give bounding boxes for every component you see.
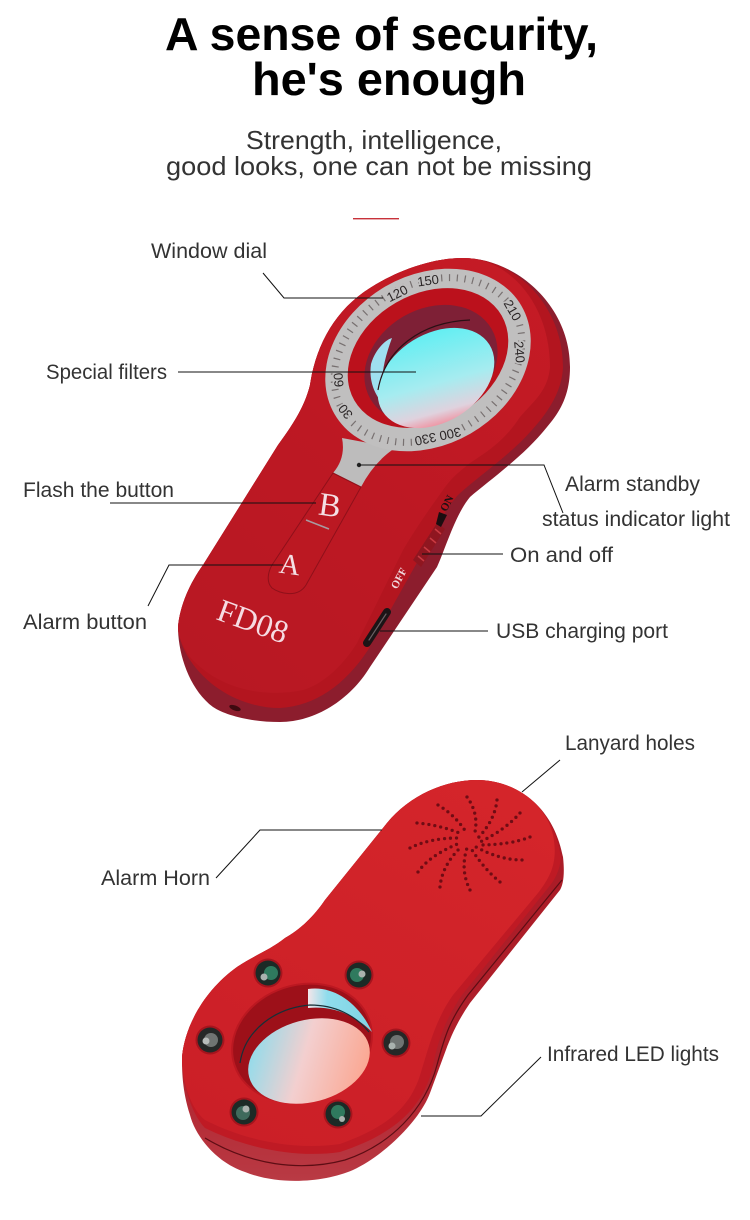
dial numbers: 240 (511, 341, 528, 364)
callout: USB charging port: USB charging port (496, 620, 668, 643)
power switch: ON (438, 493, 457, 514)
device bevel (178, 258, 563, 708)
product: back view of detector (182, 780, 564, 1181)
speaker dots (410, 797, 530, 890)
rear shell side (182, 780, 564, 1181)
subtitle (166, 125, 592, 181)
dial numbers: 210 (501, 297, 524, 323)
device side shell (178, 258, 570, 722)
callout: Alarm standby status indicator light (359, 465, 730, 531)
subtitle: Strength, intelligence, (246, 125, 502, 155)
USB port (367, 612, 387, 643)
rear shell face (182, 780, 555, 1146)
bottom hole (229, 704, 241, 712)
special filter glass (359, 307, 513, 449)
callout: Alarm standby status indicator light: Alarm standby (565, 473, 700, 496)
button B letter: B (316, 487, 343, 525)
dial numbers (330, 272, 528, 449)
silver dial ring and tab (292, 232, 564, 488)
dial numbers: 60 (330, 372, 347, 388)
callout: Alarm button: Alarm button (23, 611, 147, 634)
product: front view of detector (178, 232, 570, 722)
infrared LEDs (196, 958, 410, 1128)
red bezel (322, 260, 534, 456)
lens upper reflection (308, 988, 372, 1032)
infrared filter glass (239, 1005, 379, 1117)
rear shell bevel (182, 780, 561, 1154)
lens inner arc (240, 1005, 369, 1063)
callout: On and off: On and off (510, 544, 613, 567)
callout: Special filters: Special filters (46, 361, 167, 384)
lens recess (217, 966, 387, 1120)
accent rule (353, 218, 399, 219)
button strip (268, 473, 361, 594)
dial numbers: 120 (384, 282, 410, 305)
dial numbers: 30 (335, 401, 356, 422)
title: A sense of security, (165, 8, 598, 60)
callout: Alarm button (23, 565, 283, 634)
callout: Lanyard holes: Lanyard holes (565, 732, 695, 755)
filter edge arc (378, 320, 470, 390)
power switch (389, 493, 457, 591)
callout: Infrared LED lights: Infrared LED lights (547, 1043, 719, 1066)
callout: Flash the button: Flash the button (23, 479, 174, 502)
callout: Alarm standby status indicator light: status indicator light (542, 508, 730, 531)
button separator (306, 520, 329, 529)
dial numbers: 150 (416, 272, 440, 289)
callout: Alarm Horn: Alarm Horn (101, 867, 210, 890)
lens opening (343, 281, 519, 447)
lens left reflection (370, 338, 392, 412)
dial ticks (304, 245, 552, 475)
callout: Lanyard holes (522, 732, 695, 792)
indicator light (357, 463, 361, 467)
button A letter: A (277, 548, 303, 582)
subtitle: good looks, one can not be missing (166, 151, 592, 181)
title: he's enough (252, 53, 526, 105)
callout: Window dial: Window dial (151, 240, 267, 263)
dial numbers: 300 330 (413, 424, 462, 449)
callout: Alarm Horn (101, 830, 382, 890)
device face (178, 258, 550, 693)
power switch: OFF (389, 566, 410, 591)
FD08 model mark: FD08 (213, 592, 293, 650)
callout: Infrared LED lights (421, 1043, 719, 1116)
rear shell seam (205, 880, 562, 1166)
callout: Window dial (151, 240, 383, 298)
title (165, 8, 598, 105)
